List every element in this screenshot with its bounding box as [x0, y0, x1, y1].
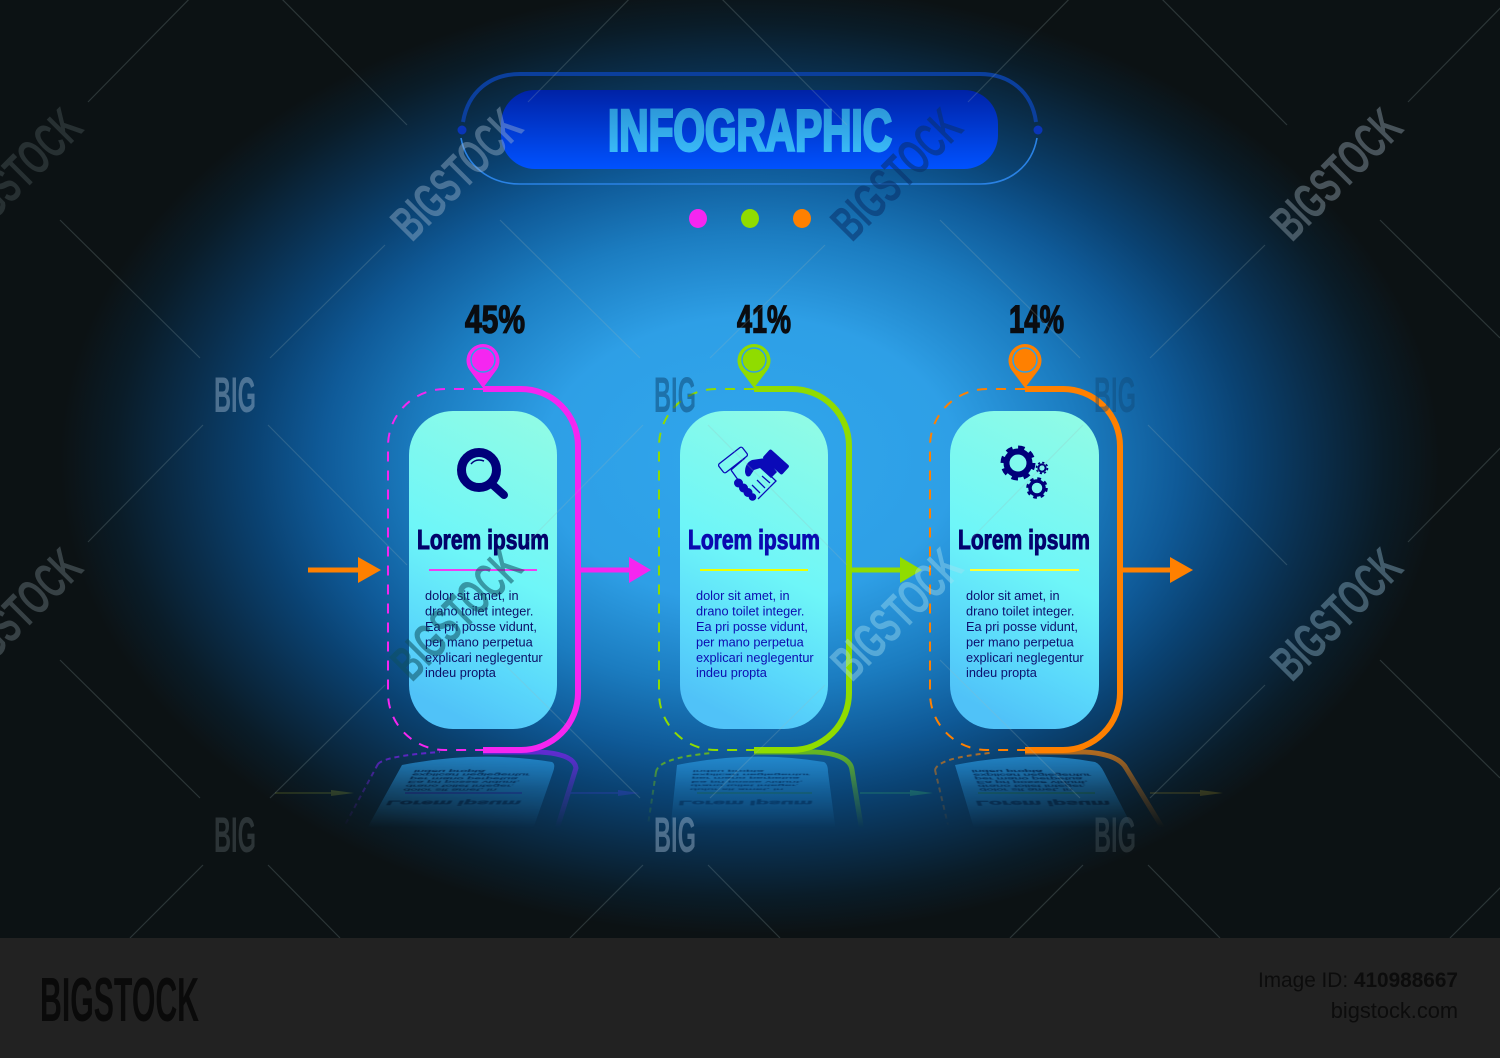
body text [425, 588, 543, 680]
watermark text: BIG [654, 807, 696, 863]
body text: dolor sit amet, in [696, 588, 790, 603]
watermark text: BIGSTOCK [1260, 538, 1413, 691]
body text: drano toilet integer. [425, 604, 533, 618]
divider [700, 569, 808, 571]
body text: dolor sit amet, in [966, 588, 1060, 603]
watermark text: BIGSTOCK [380, 98, 533, 251]
divider [429, 569, 537, 571]
heading: Lorem ipsum [688, 524, 820, 555]
icon: gears [1002, 448, 1048, 498]
reflection: step 1: explicari neglegentur [411, 773, 531, 776]
image id: Image ID: 410988667 [1258, 969, 1458, 992]
track [930, 389, 1120, 750]
reflection: step 1: Lorem ipsum [384, 799, 523, 807]
reflection: step 3: drano toilet integer. [977, 784, 1087, 787]
reflection: step 1: dolor sit amet, in [402, 788, 498, 791]
card [950, 411, 1099, 729]
reflection: step 2: explicari neglegentur [692, 773, 810, 776]
body text: explicari neglegentur [425, 650, 543, 665]
body text [966, 588, 1084, 680]
footer bar: BIGSTOCK [40, 966, 199, 1035]
watermark text: BIG [654, 367, 696, 423]
watermark text: BIG [214, 367, 256, 423]
card [680, 411, 828, 729]
icon: handshake [718, 446, 790, 501]
body text: per mano perpetua [696, 634, 805, 650]
panel: step 2 [659, 298, 922, 750]
reflection: step 2: Lorem ipsum [678, 799, 813, 806]
reflection: step 2: Ea pri posse vidunt, [691, 780, 803, 784]
watermark text: BIGSTOCK [820, 538, 973, 691]
pin [1009, 344, 1042, 388]
watermark text [0, 98, 1413, 863]
percentage 41%: 41% [737, 298, 791, 342]
reflection: step 3: Lorem ipsum [974, 799, 1112, 807]
reflection: step 1: Ea pri posse vidunt, [407, 780, 521, 784]
arrow [1123, 557, 1193, 583]
reflection: step 1: drano toilet integer. [405, 784, 515, 787]
body text: Ea pri posse vidunt, [696, 619, 808, 634]
reflection: step 3: Ea pri posse vidunt, [976, 780, 1089, 784]
arrow: entry [308, 557, 381, 583]
reflection: step 3: per mano perpetua [974, 777, 1084, 780]
site url: bigstock.com [1331, 998, 1458, 1023]
arrow [581, 557, 651, 583]
body text: indeu propta [425, 665, 497, 680]
panel: step 3 [930, 298, 1193, 750]
body text: Ea pri posse vidunt, [425, 619, 537, 634]
watermark text: BIG [1094, 807, 1136, 863]
body text [696, 588, 814, 680]
divider [970, 569, 1079, 571]
heading: Lorem ipsum [958, 524, 1090, 555]
watermark text: BIGSTOCK [820, 98, 973, 251]
watermark text: BIGSTOCK [1260, 98, 1413, 251]
body text: indeu propta [966, 665, 1038, 680]
pin [467, 344, 500, 388]
title text: INFOGRAPHIC [608, 98, 892, 164]
arrow [852, 557, 922, 583]
reflection of the three steps [275, 752, 1223, 832]
body text: drano toilet integer. [966, 604, 1074, 618]
reflection: step 2: drano toilet integer. [690, 784, 799, 787]
reflection: step 2: dolor sit amet, in [690, 788, 784, 791]
watermark text: BIGSTOCK [380, 538, 533, 691]
reflection: step 2: per mano perpetua [691, 777, 801, 780]
legend dots [689, 209, 811, 228]
icon: magnifier [462, 452, 504, 495]
footer bar [0, 938, 1500, 1058]
reflection: step 3: explicari neglegentur [973, 773, 1091, 776]
reflection: step 1: indeu propta [413, 769, 487, 773]
heading: Lorem ipsum [417, 524, 549, 555]
track [659, 389, 849, 750]
card [409, 411, 557, 729]
body text: indeu propta [696, 665, 768, 680]
body text: explicari neglegentur [966, 650, 1084, 665]
reflection: step 1 [275, 752, 640, 832]
reflection: step 2: indeu propta [693, 769, 765, 773]
reflection: step 3 [935, 752, 1223, 832]
percentage 14%: 14% [1009, 298, 1064, 342]
title banner [458, 74, 1042, 184]
panel: step 1 [388, 298, 651, 750]
body text: Ea pri posse vidunt, [966, 619, 1078, 634]
pin [737, 344, 770, 388]
track [388, 389, 578, 750]
body text: dolor sit amet, in [425, 588, 519, 603]
body text: drano toilet integer. [696, 604, 804, 618]
watermark text: BIG [214, 807, 256, 863]
reflection: step 3: indeu propta [971, 769, 1044, 773]
watermark text: BIG [1094, 367, 1136, 423]
body text: explicari neglegentur [696, 650, 814, 665]
body text: per mano perpetua [425, 634, 534, 650]
reflection: step 2 [648, 750, 932, 820]
percentage 45%: 45% [465, 298, 525, 342]
reflection: step 1: per mano perpetua [409, 777, 520, 780]
body text: per mano perpetua [966, 634, 1075, 650]
reflection: step 3: dolor sit amet, in [979, 788, 1073, 791]
